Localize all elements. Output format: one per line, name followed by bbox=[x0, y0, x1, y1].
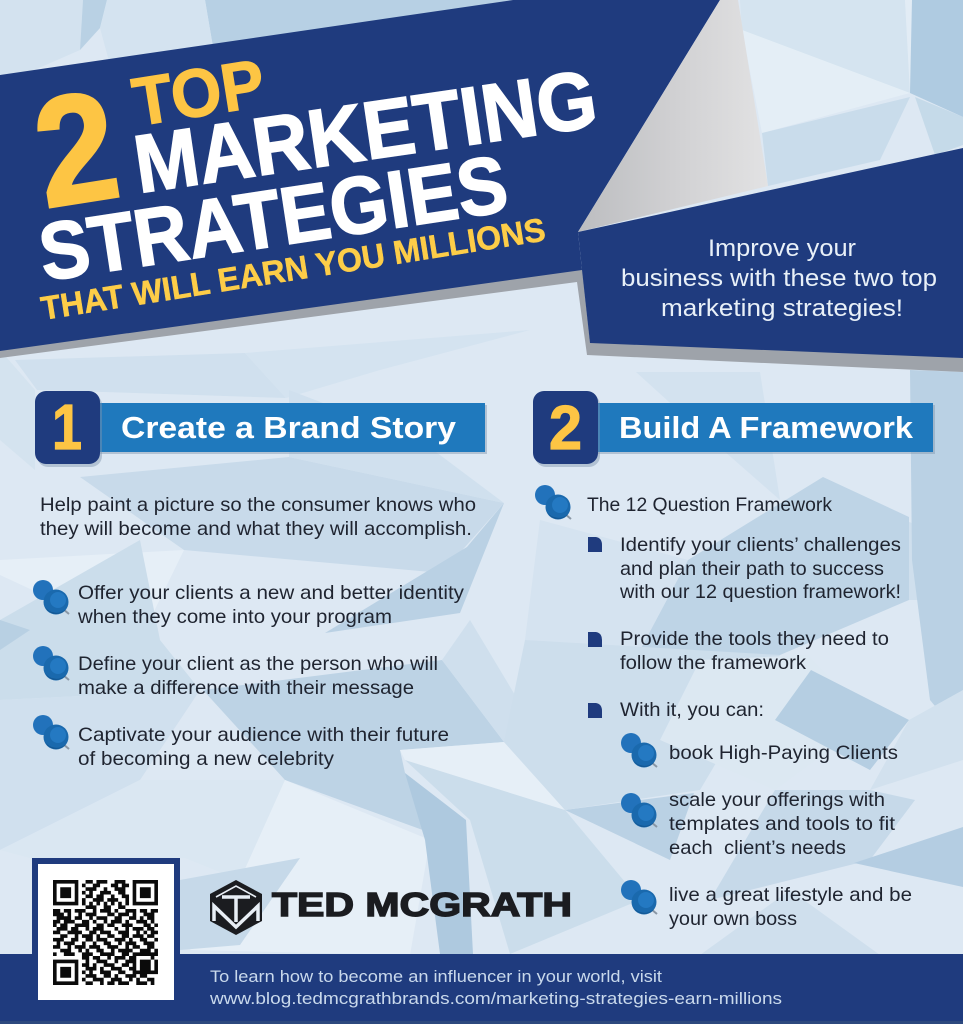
icon: hexagon emblem bbox=[210, 880, 262, 935]
title: THAT WILL EARN YOU MILLIONS bbox=[38, 211, 548, 327]
icon: bullet 2 bbox=[588, 632, 602, 647]
sub item 2: each client’s needs bbox=[669, 837, 846, 859]
framework heading: The 12 Question Framework bbox=[587, 494, 832, 516]
sub item 2: templates and tools to fit bbox=[669, 813, 896, 835]
bullet text 1: Offer your clients a new and better identity bbox=[78, 582, 464, 604]
icon: pin 1 bbox=[33, 580, 69, 614]
section 2 list bbox=[535, 485, 912, 930]
QR code bbox=[32, 858, 180, 1008]
section 1 header: 1 bbox=[52, 391, 82, 463]
footer text: To learn how to become an influencer in your world, visit bbox=[210, 967, 662, 986]
wordmark: TED MCGRATH bbox=[272, 886, 572, 923]
framework item 1: with our 12 question framework! bbox=[619, 581, 901, 603]
framework item 2 bbox=[620, 628, 889, 674]
section 1 intro text: Help paint a picture so the consumer knows who bbox=[40, 494, 476, 516]
footer text bbox=[209, 967, 782, 1008]
icon: bullet 3 bbox=[588, 703, 602, 718]
bullet text 1: when they come into your program bbox=[77, 606, 392, 628]
bullet text 2: Define your client as the person who will bbox=[78, 653, 438, 675]
section 1 header bbox=[35, 391, 487, 467]
icon: pin sub 1 bbox=[621, 733, 657, 768]
title: MARKETING bbox=[128, 53, 603, 211]
sub item 2 bbox=[669, 789, 896, 859]
bullet text 2 bbox=[78, 653, 438, 699]
section 1 intro text bbox=[40, 494, 476, 540]
section 2 header: 2 bbox=[549, 394, 582, 463]
sub item 3: your own boss bbox=[669, 908, 797, 930]
bullet text 3: Captivate your audience with their future bbox=[78, 724, 449, 746]
section 1 intro text: they will become and what they will accomplish. bbox=[40, 518, 472, 540]
footer band bbox=[0, 954, 963, 1024]
icon: bullet 1 bbox=[588, 537, 602, 552]
framework item 2: follow the framework bbox=[620, 652, 806, 674]
sub item 3 bbox=[669, 884, 912, 930]
logo: Ted McGrath bbox=[210, 880, 572, 935]
subtitle text: Improve your bbox=[708, 235, 856, 262]
sub item 3: live a great lifestyle and be bbox=[669, 884, 912, 906]
framework item 2: Provide the tools they need to bbox=[620, 628, 889, 650]
sub item 1: book High-Paying Clients bbox=[669, 742, 898, 764]
title: TOP bbox=[127, 45, 270, 141]
section 2 header: Build A Framework bbox=[619, 410, 914, 445]
banner shadow bbox=[0, 268, 963, 372]
framework item 1 bbox=[619, 534, 901, 603]
icon: pin 2 bbox=[33, 646, 69, 680]
footer text: www.blog.tedmcgrathbrands.com/marketing-strategies-earn-millions bbox=[209, 989, 782, 1008]
bullet text 1 bbox=[77, 582, 464, 628]
grey fold triangle bbox=[578, 0, 768, 232]
bullet text 2: make a difference with their message bbox=[78, 677, 414, 699]
subtitle text: business with these two top bbox=[621, 265, 937, 292]
section 1 header: Create a Brand Story bbox=[121, 410, 457, 445]
icon: pin sub 2 bbox=[621, 793, 657, 828]
section 2 header bbox=[533, 391, 935, 467]
framework item 1: Identify your clients’ challenges bbox=[620, 534, 901, 556]
icon: pin 3 bbox=[33, 715, 69, 750]
framework item 3: With it, you can: bbox=[620, 699, 764, 721]
sub item 2: scale your offerings with bbox=[669, 789, 885, 811]
subtitle banner bbox=[578, 148, 963, 358]
subtitle text bbox=[621, 235, 937, 322]
bullet text 3 bbox=[78, 724, 449, 770]
title: 2 bbox=[23, 57, 129, 241]
icon: pin framework bbox=[535, 485, 571, 520]
section 1 bullet list bbox=[33, 580, 464, 770]
bullet text 3: of becoming a new celebrity bbox=[78, 748, 334, 770]
main title banner bbox=[0, 0, 720, 351]
framework item 1: and plan their path to success bbox=[620, 558, 884, 580]
title bbox=[23, 45, 603, 327]
title: STRATEGIES bbox=[33, 139, 513, 299]
subtitle text: marketing strategies! bbox=[661, 295, 903, 322]
icon: pin sub 3 bbox=[621, 880, 657, 914]
